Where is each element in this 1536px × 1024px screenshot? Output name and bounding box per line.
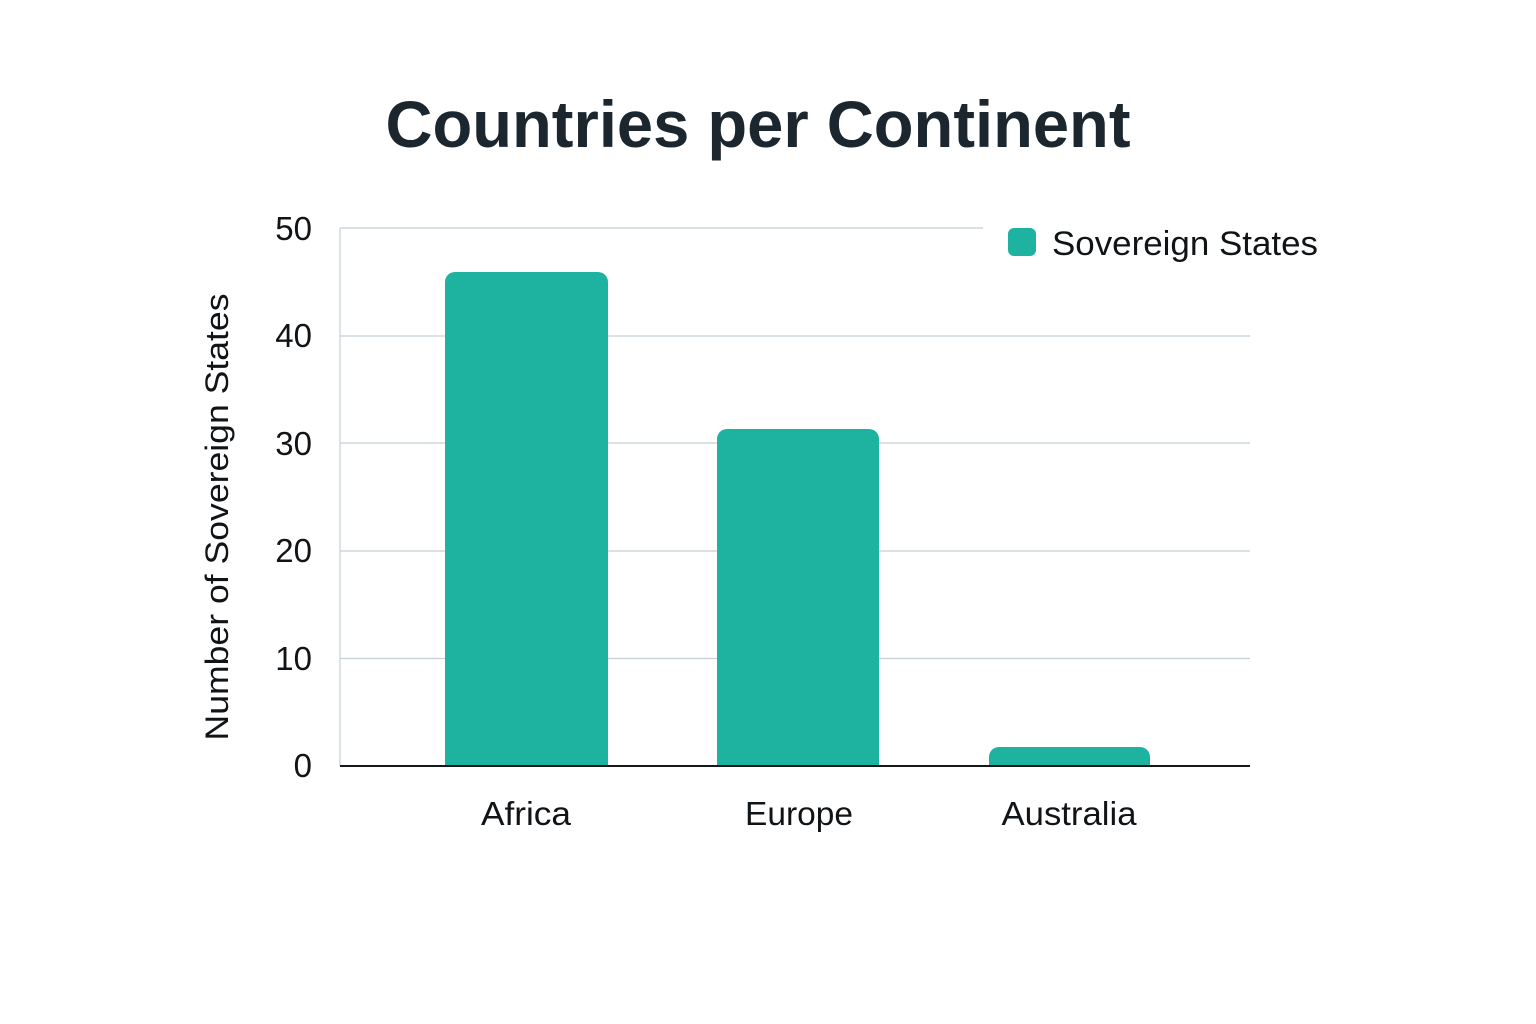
y axis tick labels: 10 bbox=[275, 640, 312, 677]
x axis line bbox=[340, 765, 1250, 767]
x axis labels: Europe bbox=[745, 795, 853, 832]
y axis tick labels: 20 bbox=[275, 532, 312, 569]
y axis tick labels: 50 bbox=[275, 210, 312, 247]
legend bbox=[1008, 225, 1318, 263]
title: Countries per Continent bbox=[386, 87, 1131, 161]
legend label: Sovereign States bbox=[1052, 225, 1318, 263]
y axis tick labels: 40 bbox=[275, 317, 312, 354]
bar: Europe bbox=[717, 429, 879, 766]
y axis tick labels bbox=[275, 210, 312, 784]
y axis tick labels: 30 bbox=[275, 425, 312, 462]
y axis title: Number of Sovereign States bbox=[199, 294, 235, 740]
bar chart bbox=[199, 210, 1250, 832]
bar: Africa bbox=[445, 272, 608, 766]
bar: Australia bbox=[989, 747, 1150, 766]
x axis labels: Africa bbox=[481, 795, 572, 832]
x axis labels: Australia bbox=[1002, 795, 1137, 832]
legend swatch bbox=[1008, 228, 1036, 256]
y axis tick labels: 0 bbox=[294, 747, 312, 784]
x axis labels bbox=[481, 795, 1137, 832]
